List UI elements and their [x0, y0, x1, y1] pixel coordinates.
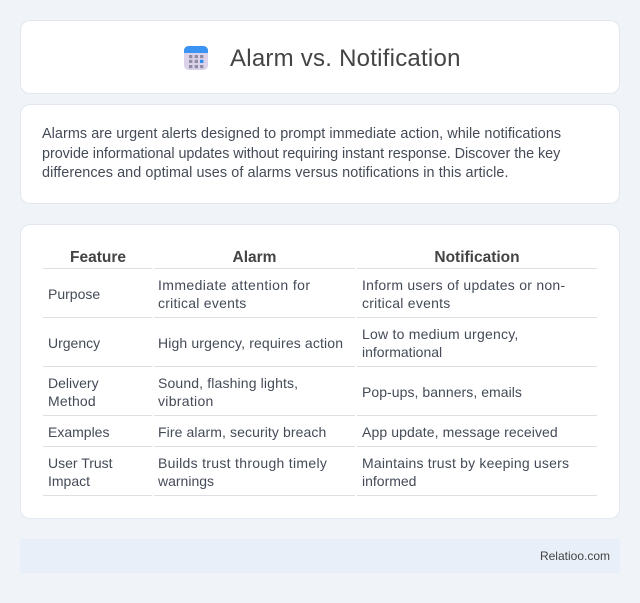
title: Alarm vs. Notification	[230, 45, 461, 72]
panel: introduction	[20, 104, 620, 204]
row: User Trust Impact: Builds trust through timely	[158, 455, 327, 471]
intro line 2: provide informational updates without requiring instant response. Discover the key	[42, 146, 560, 162]
row: Examples: App update, message received	[362, 424, 558, 440]
row: Purpose: critical events	[158, 295, 247, 311]
panel: comparison table	[20, 224, 620, 519]
icon: calendar	[184, 46, 208, 70]
row: Delivery Method: Method	[48, 393, 96, 409]
row: User Trust Impact: warnings	[158, 473, 214, 489]
header: Notification: Notification	[434, 249, 520, 266]
row: Purpose: Inform users of updates or non-	[362, 277, 565, 293]
intro line 1: Alarms are urgent alerts designed to prompt immediate action, while notifications	[42, 126, 561, 142]
footer credit: Relatioo.com	[540, 549, 610, 563]
title card	[20, 20, 620, 94]
row: Urgency: informational	[362, 344, 442, 360]
row: Examples	[48, 424, 558, 440]
footer bar	[20, 539, 620, 573]
row: Delivery Method: Delivery	[48, 375, 99, 391]
row: Delivery Method: Sound, flashing lights,	[158, 375, 298, 391]
row: Purpose	[48, 277, 565, 311]
header: Feature: Feature	[70, 249, 126, 266]
row: Delivery Method: vibration	[158, 393, 214, 409]
intro line 3: differences and optimal uses of alarms versus notifications in this article.	[42, 165, 509, 181]
row: Purpose: Immediate attention for	[158, 277, 310, 293]
row: Purpose: critical events	[362, 295, 451, 311]
row: User Trust Impact: Impact	[48, 473, 90, 489]
row: User Trust Impact: informed	[362, 473, 416, 489]
row: User Trust Impact: User Trust	[48, 455, 113, 471]
row: Examples: Examples	[48, 424, 109, 440]
row: Purpose: Purpose	[48, 286, 100, 302]
header: Alarm: Alarm	[233, 249, 276, 266]
row: User Trust Impact	[48, 455, 569, 489]
row: Delivery Method: Pop-ups, banners, emails	[362, 384, 522, 400]
row: Urgency: Urgency	[48, 335, 100, 351]
row: Delivery Method	[48, 375, 522, 409]
row: Urgency: High urgency, requires action	[158, 335, 343, 351]
row: User Trust Impact: Maintains trust by keeping users	[362, 455, 569, 471]
row: Examples: Fire alarm, security breach	[158, 424, 326, 440]
row: Urgency: Low to medium urgency,	[362, 326, 519, 342]
row: Urgency	[48, 326, 519, 360]
